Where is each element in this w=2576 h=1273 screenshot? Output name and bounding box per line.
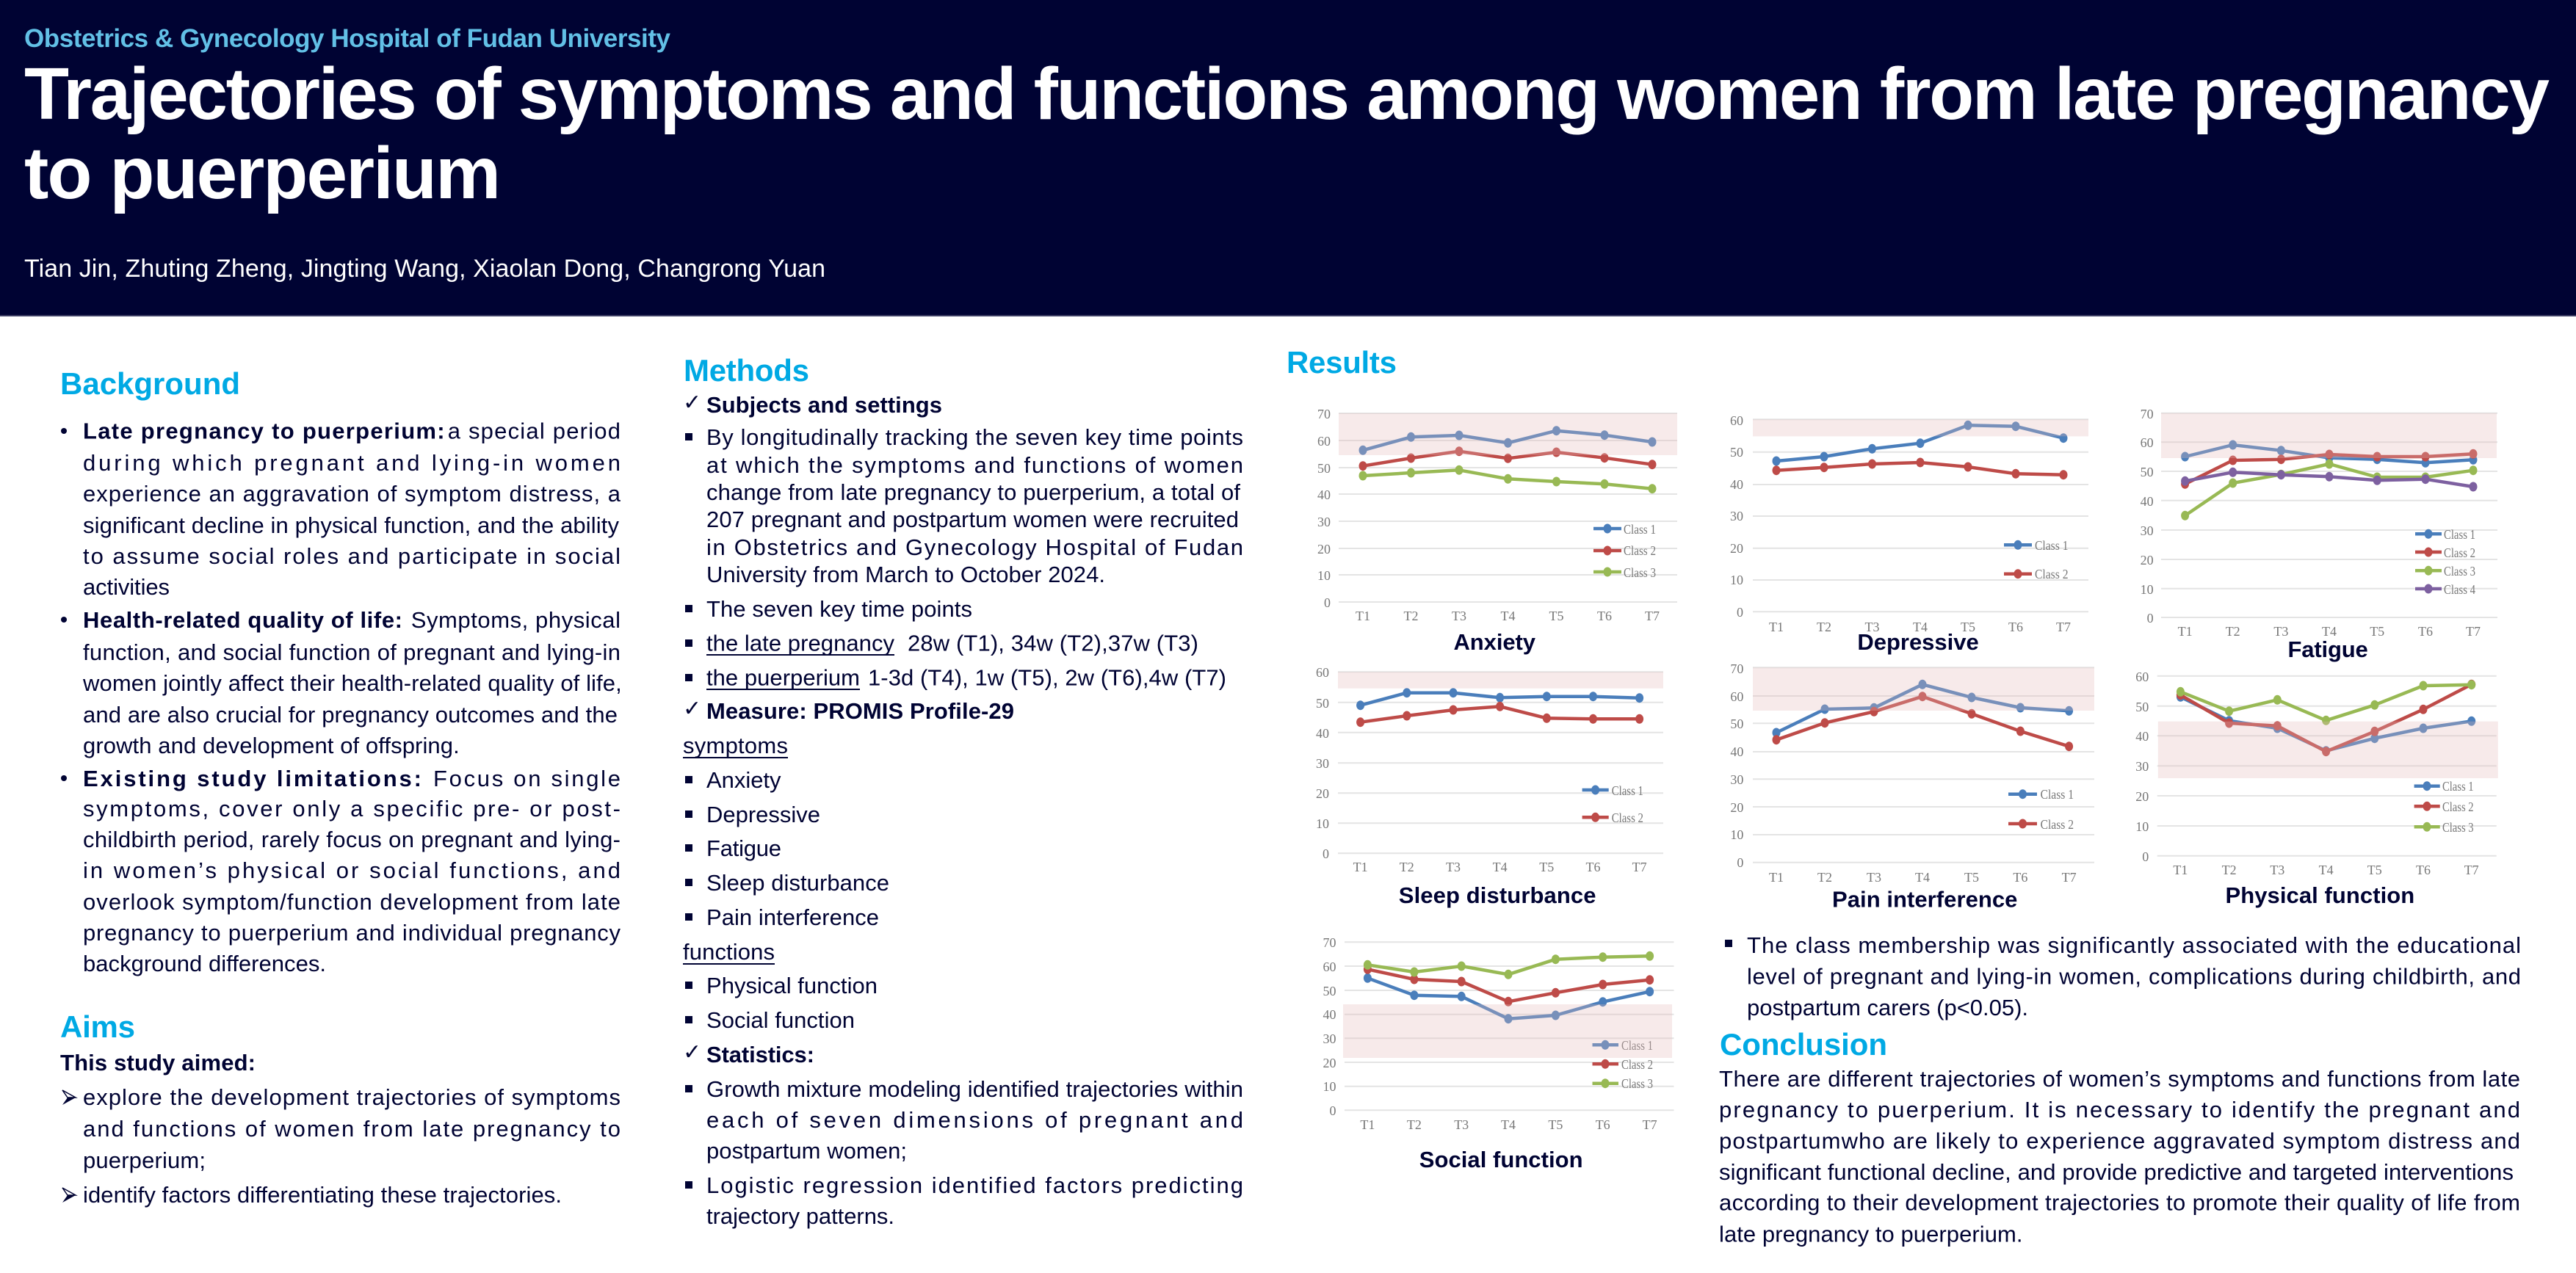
chart: pain interference: 0 <box>1737 855 1743 870</box>
chart: fatigue: 70 <box>2141 407 2154 421</box>
chart: sleep disturbance: T1 <box>1353 860 1368 874</box>
chart: social function: T1 <box>1360 1117 1375 1132</box>
chart: fatigue: 40 <box>2141 494 2154 509</box>
chart: physical function: T1 <box>2173 863 2188 877</box>
chart: social function: 40 <box>1323 1007 1336 1022</box>
chart: anxiety: 40 <box>1317 487 1331 502</box>
chart: social function <box>1323 935 1674 1172</box>
bullet: late pregnancy to puerperium: to assume social roles and participate in social <box>83 543 621 569</box>
chart: anxiety: T4 <box>1501 609 1516 623</box>
legend <box>1593 522 1656 580</box>
chart: sleep disturbance <box>1316 665 1663 908</box>
chart: pain interference: 50 <box>1730 717 1743 731</box>
legend: Class 2 <box>2041 817 2074 832</box>
chart: fatigue: T4 <box>2322 624 2337 639</box>
aim 1: and functions of women from late pregnancy to <box>83 1116 621 1142</box>
chart: depressive: 60 <box>1730 413 1743 428</box>
text block: conclusion: pregnancy to puerperium. It is necessary to identify the pregnant and <box>1719 1097 2520 1123</box>
chart: social function: T5 <box>1548 1117 1563 1132</box>
chart: pain interference: T1 <box>1769 870 1784 885</box>
subjects and settings: Subjects and settings <box>706 392 942 418</box>
chart: pain interference: T7 <box>2062 870 2077 885</box>
chart: social function: 60 <box>1323 960 1336 974</box>
chart: pain interference: T4 <box>1915 870 1930 885</box>
chart: anxiety: 70 <box>1317 407 1331 421</box>
chart: sleep disturbance: 10 <box>1316 816 1329 831</box>
authors: Tian Jin, Zhuting Zheng, Jingting Wang, Xiaolan Dong, Changrong Yuan <box>24 255 825 283</box>
chart: depressive: T1 <box>1769 620 1784 634</box>
text block: class membership finding: level of pregnant and lying-in women, complications during childbirth, and <box>1747 964 2521 990</box>
chart: anxiety: T1 <box>1356 609 1370 623</box>
legend: Class 2 <box>2444 545 2475 560</box>
chart: fatigue: T7 <box>2466 624 2481 639</box>
statistics: ✓ <box>683 1040 701 1065</box>
chart: pain interference: T6 <box>2013 870 2027 885</box>
statistics: each of seven dimensions of pregnant and <box>706 1107 1243 1133</box>
legend: Class 2 <box>1624 543 1656 558</box>
chart: sleep disturbance: 0 <box>1323 846 1329 861</box>
chart: sleep disturbance: T5 <box>1539 860 1554 874</box>
chart: sleep disturbance: T7 <box>1632 860 1647 874</box>
subjects and settings: in Obstetrics and Gynecology Hospital of Fudan <box>706 534 1243 560</box>
chart: anxiety: 20 <box>1317 542 1331 556</box>
chart: anxiety: T3 <box>1452 609 1466 623</box>
chart: depressive: T5 <box>1961 620 1975 634</box>
statistics: postpartum women; <box>706 1138 907 1164</box>
chart: physical function: T5 <box>2367 863 2382 877</box>
measure: PROMIS Profile-29: ✓ <box>683 696 701 722</box>
legend: Class 2 <box>2035 567 2068 581</box>
chart: anxiety: T7 <box>1645 609 1660 623</box>
bullet: late pregnancy to puerperium: Late pregnancy to puerperium: <box>83 418 445 443</box>
chart: depressive: T7 <box>2056 620 2071 634</box>
chart: physical function: 40 <box>2135 729 2149 744</box>
chart: fatigue: 50 <box>2141 465 2154 479</box>
text block: conclusion: significant functional decline, and provide predictive and targeted interventions <box>1719 1159 2514 1185</box>
legend: Class 1 <box>2442 779 2474 794</box>
bullet: late pregnancy to puerperium: significant decline in physical function, and the ability <box>83 512 620 538</box>
bullet: health-related quality of life <box>61 607 622 758</box>
panel: methods <box>683 353 1243 1229</box>
chart: sleep disturbance: T2 <box>1400 860 1414 874</box>
chart: social function: 50 <box>1323 984 1336 998</box>
chart: pain interference: T3 <box>1867 870 1881 885</box>
chart: pain interference: 10 <box>1730 827 1743 842</box>
measure: PROMIS Profile-29: Physical function <box>706 973 878 998</box>
measure: PROMIS Profile-29: Measure: PROMIS Profile-29 <box>706 698 1014 724</box>
text block: class membership finding: postpartum carers (p<0.05). <box>1747 995 2028 1020</box>
bullet: health-related quality of life: Health-related quality of life: <box>83 607 402 633</box>
chart: pain interference: 40 <box>1730 744 1743 759</box>
chart title: Social function <box>1419 1147 1583 1172</box>
chart: social function: T4 <box>1501 1117 1516 1132</box>
legend: Class 2 <box>2442 799 2474 814</box>
legend: Class 1 <box>1624 522 1656 537</box>
chart: anxiety: 30 <box>1317 515 1331 529</box>
measure: PROMIS Profile-29 <box>683 696 1014 1033</box>
legend: Class 3 <box>1624 565 1656 580</box>
aim 1: puerperium; <box>83 1147 206 1173</box>
chart: physical function: 60 <box>2135 670 2149 684</box>
chart title: Sleep disturbance <box>1399 882 1596 908</box>
bullet: existing study limitations: childbirth period, rarely focus on pregnant and lying- <box>83 827 621 852</box>
legend: Class 3 <box>2444 564 2475 579</box>
chart: depressive: 30 <box>1730 509 1743 523</box>
bullet: existing study limitations <box>61 766 621 976</box>
bullet: existing study limitations: pregnancy to puerperium and individual pregnancy <box>83 920 621 946</box>
chart: depressive: 0 <box>1737 605 1743 620</box>
chart: depressive: T3 <box>1865 620 1880 634</box>
bullet: health-related quality of life: women jointly affect their health-related quality of life, <box>82 670 622 696</box>
title: to puerperium <box>24 132 501 214</box>
legend: Class 1 <box>2444 527 2475 542</box>
bullet: late pregnancy to puerperium: a special period <box>448 418 621 443</box>
bullet: late pregnancy to puerperium: experience an aggravation of symptom distress, a <box>83 481 621 507</box>
measure: PROMIS Profile-29: Anxiety <box>706 767 781 793</box>
text block: conclusion: There are different trajectories of women’s symptoms and functions from late <box>1719 1066 2520 1092</box>
bullet: existing study limitations: background differences. <box>83 951 326 976</box>
chart: depressive: T6 <box>2008 620 2023 634</box>
measure: PROMIS Profile-29: Sleep disturbance <box>706 870 889 896</box>
subjects and settings: The seven key time points <box>706 596 972 622</box>
bullet: health-related quality of life: function, and social function of pregnant and lying-in <box>83 639 621 665</box>
aim 1 <box>62 1084 621 1173</box>
chart: social function: T2 <box>1407 1117 1422 1132</box>
panel: background <box>60 366 622 976</box>
legend <box>2008 787 2074 832</box>
legend <box>2414 779 2474 835</box>
subjects and settings: the late pregnancy <box>706 630 894 656</box>
heading: background: Background <box>60 366 240 401</box>
chart: depressive: 20 <box>1730 541 1743 556</box>
chart: fatigue: 20 <box>2141 553 2154 567</box>
bullet: existing study limitations: symptoms, cover only a specific pre- or post- <box>83 796 621 822</box>
chart: physical function: T7 <box>2464 863 2479 877</box>
chart: anxiety: 50 <box>1317 461 1331 476</box>
chart: sleep disturbance: T3 <box>1446 860 1461 874</box>
legend: Class 1 <box>2041 787 2074 802</box>
subjects and settings: 1-3d (T4), 1w (T5), 2w (T6),4w (T7) <box>868 665 1226 690</box>
chart: pain interference: 30 <box>1730 772 1743 787</box>
bullet: existing study limitations: Existing study limitations: <box>83 766 422 791</box>
bullet: late pregnancy to puerperium <box>61 418 621 600</box>
chart: social function: 10 <box>1323 1079 1336 1094</box>
bullet: health-related quality of life: growth and development of offspring. <box>83 733 460 758</box>
subjects and settings <box>683 390 1243 690</box>
chart: depressive: 10 <box>1730 573 1743 587</box>
chart: depressive: T4 <box>1913 620 1928 634</box>
chart: physical function: T3 <box>2270 863 2284 877</box>
statistics: trajectory patterns. <box>706 1203 894 1229</box>
chart: anxiety: T2 <box>1404 609 1419 623</box>
chart: sleep disturbance: 50 <box>1316 696 1329 711</box>
text block: conclusion <box>1719 1066 2520 1247</box>
chart: anxiety: 60 <box>1317 434 1331 449</box>
aim 2: identify factors differentiating these trajectories. <box>83 1182 562 1208</box>
chart: sleep disturbance: T6 <box>1586 860 1601 874</box>
chart: pain interference: 60 <box>1730 689 1743 704</box>
chart: anxiety <box>1317 407 1677 655</box>
chart: fatigue: T2 <box>2226 624 2240 639</box>
chart: social function: T7 <box>1643 1117 1657 1132</box>
legend: Class 3 <box>1621 1076 1653 1091</box>
chart title: Pain interference <box>1832 886 2017 912</box>
statistics <box>683 1040 1243 1229</box>
chart: physical function <box>2135 670 2498 908</box>
legend: Class 2 <box>1621 1057 1653 1072</box>
panel: header banner <box>0 0 2576 316</box>
panel: conclusion <box>1719 1027 2520 1247</box>
chart: depressive <box>1730 413 2088 655</box>
chart: fatigue <box>2141 407 2497 662</box>
chart: fatigue: 60 <box>2141 435 2154 450</box>
aim 1: explore the development trajectories of symptoms <box>83 1084 621 1110</box>
chart: pain interference: T2 <box>1817 870 1832 885</box>
heading: results: Results <box>1287 345 1397 380</box>
chart: pain interference: 20 <box>1730 800 1743 815</box>
subjects and settings: the puerperium <box>706 665 860 690</box>
chart: physical function: T2 <box>2222 863 2237 877</box>
bullet: late pregnancy to puerperium: during which pregnant and lying-in women <box>83 450 621 476</box>
chart: social function: T6 <box>1596 1117 1610 1132</box>
chart: physical function: 20 <box>2135 789 2149 804</box>
measure: PROMIS Profile-29: functions <box>683 939 775 965</box>
chart: anxiety: 10 <box>1317 568 1331 583</box>
statistics: Growth mixture modeling identified trajectories within <box>706 1076 1243 1102</box>
measure: PROMIS Profile-29: symptoms <box>683 733 788 758</box>
chart: physical function: 10 <box>2135 819 2149 834</box>
heading: aims: Aims <box>60 1009 135 1044</box>
chart title: Physical function <box>2225 882 2414 908</box>
chart: fatigue: 30 <box>2141 523 2154 538</box>
legend <box>1592 1038 1653 1091</box>
subjects and settings: change from late pregnancy to puerperium, a total of <box>706 479 1240 505</box>
legend: Class 2 <box>1612 810 1643 825</box>
institution name: Obstetrics & Gynecology Hospital of Fudan University <box>24 24 671 53</box>
chart title: Depressive <box>1857 629 1979 655</box>
statistics: Logistic regression identified factors predicting <box>706 1172 1243 1198</box>
bullet: late pregnancy to puerperium: activities <box>83 574 170 600</box>
bullet: health-related quality of life: and are also crucial for pregnancy outcomes and the <box>83 702 618 728</box>
legend: Class 1 <box>1612 783 1643 798</box>
subjects and settings: University from March to October 2024. <box>706 562 1105 587</box>
chart: physical function: T4 <box>2319 863 2334 877</box>
chart: social function: 0 <box>1329 1103 1336 1118</box>
legend: Class 1 <box>1621 1038 1653 1053</box>
chart: pain interference: T5 <box>1964 870 1979 885</box>
legend: Class 4 <box>2444 582 2475 597</box>
chart: physical function: 0 <box>2142 849 2149 864</box>
chart: depressive: T2 <box>1817 620 1831 634</box>
measure: PROMIS Profile-29: Depressive <box>706 802 820 827</box>
subjects and settings: 28w (T1), 34w (T2),37w (T3) <box>908 630 1198 656</box>
chart: pain interference: 70 <box>1730 661 1743 676</box>
chart: sleep disturbance: 30 <box>1316 756 1329 771</box>
chart: sleep disturbance: 60 <box>1316 665 1329 680</box>
text block: class membership finding <box>1725 932 2521 1020</box>
chart: physical function: 30 <box>2135 759 2149 774</box>
text block: conclusion: late pregnancy to puerperium. <box>1719 1222 2022 1247</box>
chart: sleep disturbance: 40 <box>1316 726 1329 741</box>
title <box>24 53 2550 214</box>
heading: conclusion: Conclusion <box>1720 1027 1887 1062</box>
chart: fatigue: T5 <box>2370 624 2384 639</box>
bullet: existing study limitations: Focus on single <box>433 766 621 791</box>
chart: physical function: T6 <box>2416 863 2431 877</box>
legend <box>2004 538 2068 581</box>
chart: sleep disturbance: 20 <box>1316 786 1329 801</box>
chart: anxiety: 0 <box>1324 595 1331 610</box>
chart: social function: 20 <box>1323 1056 1336 1070</box>
chart: pain interference <box>1730 661 2094 912</box>
legend: Class 1 <box>2035 538 2068 553</box>
chart: fatigue: T1 <box>2178 624 2193 639</box>
text block: conclusion: postpartumwho are likely to experience aggravated symptom distress and <box>1719 1128 2520 1154</box>
subjects and settings: ✓ <box>683 390 701 416</box>
legend <box>1582 783 1643 825</box>
bullet: existing study limitations: overlook symptom/function development from late <box>83 889 621 915</box>
chart: anxiety: T5 <box>1549 609 1564 623</box>
legend <box>2415 527 2475 597</box>
chart: fatigue: T6 <box>2418 624 2433 639</box>
subjects and settings: By longitudinally tracking the seven key time points <box>706 424 1243 450</box>
chart: anxiety: T6 <box>1597 609 1612 623</box>
bullet: existing study limitations: in women’s physical or social functions, and <box>83 857 621 883</box>
text block: class membership finding: The class membership was significantly associated with the educational <box>1747 932 2521 958</box>
subjects and settings: at which the symptoms and functions of women <box>706 452 1243 478</box>
chart: social function: 70 <box>1323 935 1336 950</box>
measure: PROMIS Profile-29: Pain interference <box>706 904 879 930</box>
heading: methods: Methods <box>684 353 809 388</box>
text block: conclusion: according to their development trajectories to promote their quality of life from <box>1719 1190 2520 1216</box>
chart: social function: T3 <box>1454 1117 1469 1132</box>
panel: aims <box>60 1009 621 1208</box>
chart: social function: 30 <box>1323 1031 1336 1046</box>
chart: fatigue: 10 <box>2141 582 2154 597</box>
bullet: health-related quality of life: Symptoms, physical <box>411 607 621 633</box>
chart: fatigue: T3 <box>2273 624 2288 639</box>
chart: fatigue: 0 <box>2147 611 2154 625</box>
measure: PROMIS Profile-29: Social function <box>706 1007 855 1033</box>
statistics: Statistics: <box>706 1042 814 1067</box>
measure: PROMIS Profile-29: Fatigue <box>706 835 781 861</box>
legend: Class 3 <box>2442 820 2474 835</box>
chart: sleep disturbance: T4 <box>1493 860 1508 874</box>
lead sentence: This study aimed: <box>60 1050 256 1076</box>
subjects and settings: 207 pregnant and postpartum women were recruited <box>706 507 1239 532</box>
title: Trajectories of symptoms and functions among women from late pregnancy <box>24 53 2550 135</box>
chart: depressive: 50 <box>1730 445 1743 460</box>
chart title: Fatigue <box>2288 636 2368 662</box>
chart: physical function: 50 <box>2135 700 2149 714</box>
chart: depressive: 40 <box>1730 477 1743 492</box>
chart title: Anxiety <box>1454 629 1536 655</box>
